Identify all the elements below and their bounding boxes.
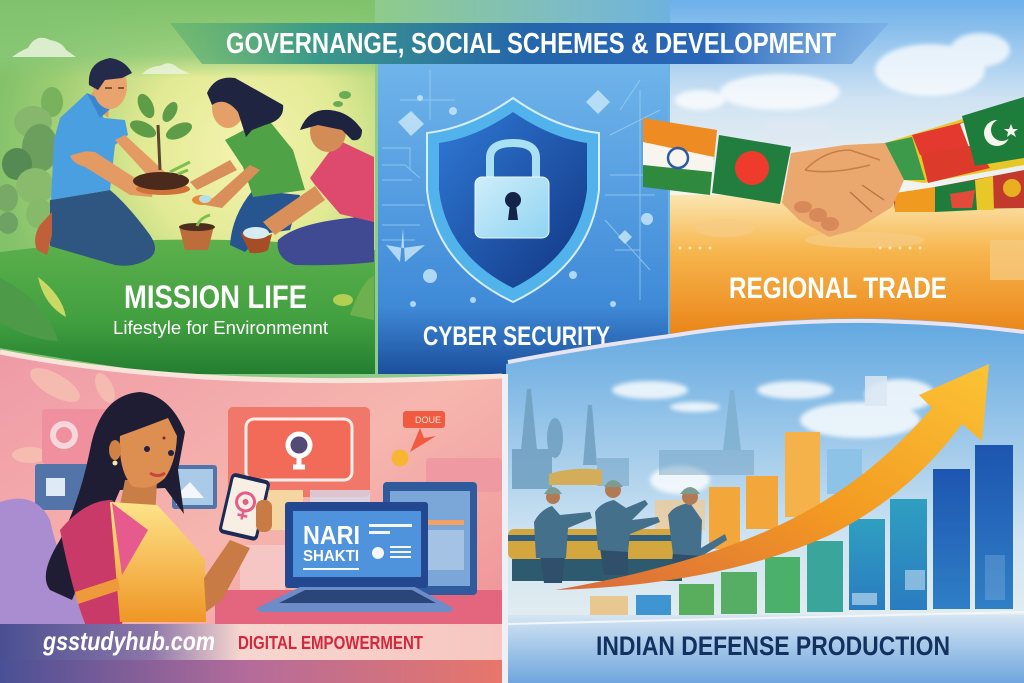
icon: smartphone xyxy=(218,472,271,542)
pipeline xyxy=(508,469,682,581)
laptop text: NARI xyxy=(303,520,360,550)
panel: mission life xyxy=(0,0,375,374)
panel: cyber security xyxy=(378,64,668,374)
footer band xyxy=(0,624,502,683)
growth arrow xyxy=(555,364,989,590)
website label: gsstudyhub.com xyxy=(42,626,215,656)
figure: woman in pink xyxy=(240,110,374,265)
sleeve: India flag xyxy=(643,118,717,195)
figure: woman in green xyxy=(190,78,305,252)
heading: regional trade: REGIONAL TRADE xyxy=(729,272,947,305)
top gradient background xyxy=(0,0,1024,380)
icon: laptop xyxy=(257,502,453,612)
icon: handshake xyxy=(782,143,904,237)
heading: indian defense production: INDIAN DEFENSE PRODUCTION xyxy=(596,631,950,661)
title banner xyxy=(170,23,889,64)
icon: small clay pot xyxy=(179,215,215,250)
clouds xyxy=(612,379,935,494)
circuit pattern xyxy=(382,70,660,300)
callout: DOUE bubble: DOUE xyxy=(415,415,441,425)
decorative leaves xyxy=(12,361,119,463)
icon: sapling in soil xyxy=(127,91,195,195)
panel: regional trade xyxy=(643,0,1024,334)
icon: laptop: SHAKTI xyxy=(303,548,359,565)
tablet xyxy=(383,482,477,595)
heading: mission life: MISSION LIFE xyxy=(124,279,307,315)
chart: production bars xyxy=(590,432,1013,617)
workers xyxy=(534,480,727,583)
sleeve: Bangladesh flag xyxy=(712,135,791,204)
label: digital empowerment: DIGITAL EMPOWERMENT xyxy=(238,633,423,653)
panel: defense production xyxy=(506,321,1024,683)
figure: chair xyxy=(0,499,85,625)
icon: hand holding phone xyxy=(256,500,272,532)
clouds xyxy=(12,38,190,74)
orange background bars xyxy=(709,432,820,549)
foreground leaves xyxy=(0,276,374,341)
refinery skyline xyxy=(512,376,887,489)
sleeves: neighbouring flags xyxy=(885,97,1024,212)
figure: man planting xyxy=(35,58,165,266)
subheading: lifestyle: Lifestyle for Environmennt xyxy=(113,318,328,338)
icon: shield with padlock xyxy=(427,98,599,302)
red screen with symbol xyxy=(228,407,370,530)
heading: cyber security: CYBER SECURITY xyxy=(423,321,610,351)
icon: sapling sprout top right xyxy=(333,91,351,107)
clouds and skyline xyxy=(675,33,1010,145)
figure: woman with smartphone xyxy=(46,392,250,624)
footer band xyxy=(508,612,1024,683)
title text: GOVERNANGE, SOCIAL SCHEMES & DEVELOPMENT xyxy=(226,28,836,60)
panel: digital empowerment xyxy=(0,352,508,683)
rising bars xyxy=(590,596,628,617)
app panels xyxy=(35,409,502,590)
foliage left xyxy=(0,87,63,234)
trade dots xyxy=(678,246,922,250)
callout: DOUE bubble xyxy=(392,411,445,466)
floor band xyxy=(215,590,502,624)
